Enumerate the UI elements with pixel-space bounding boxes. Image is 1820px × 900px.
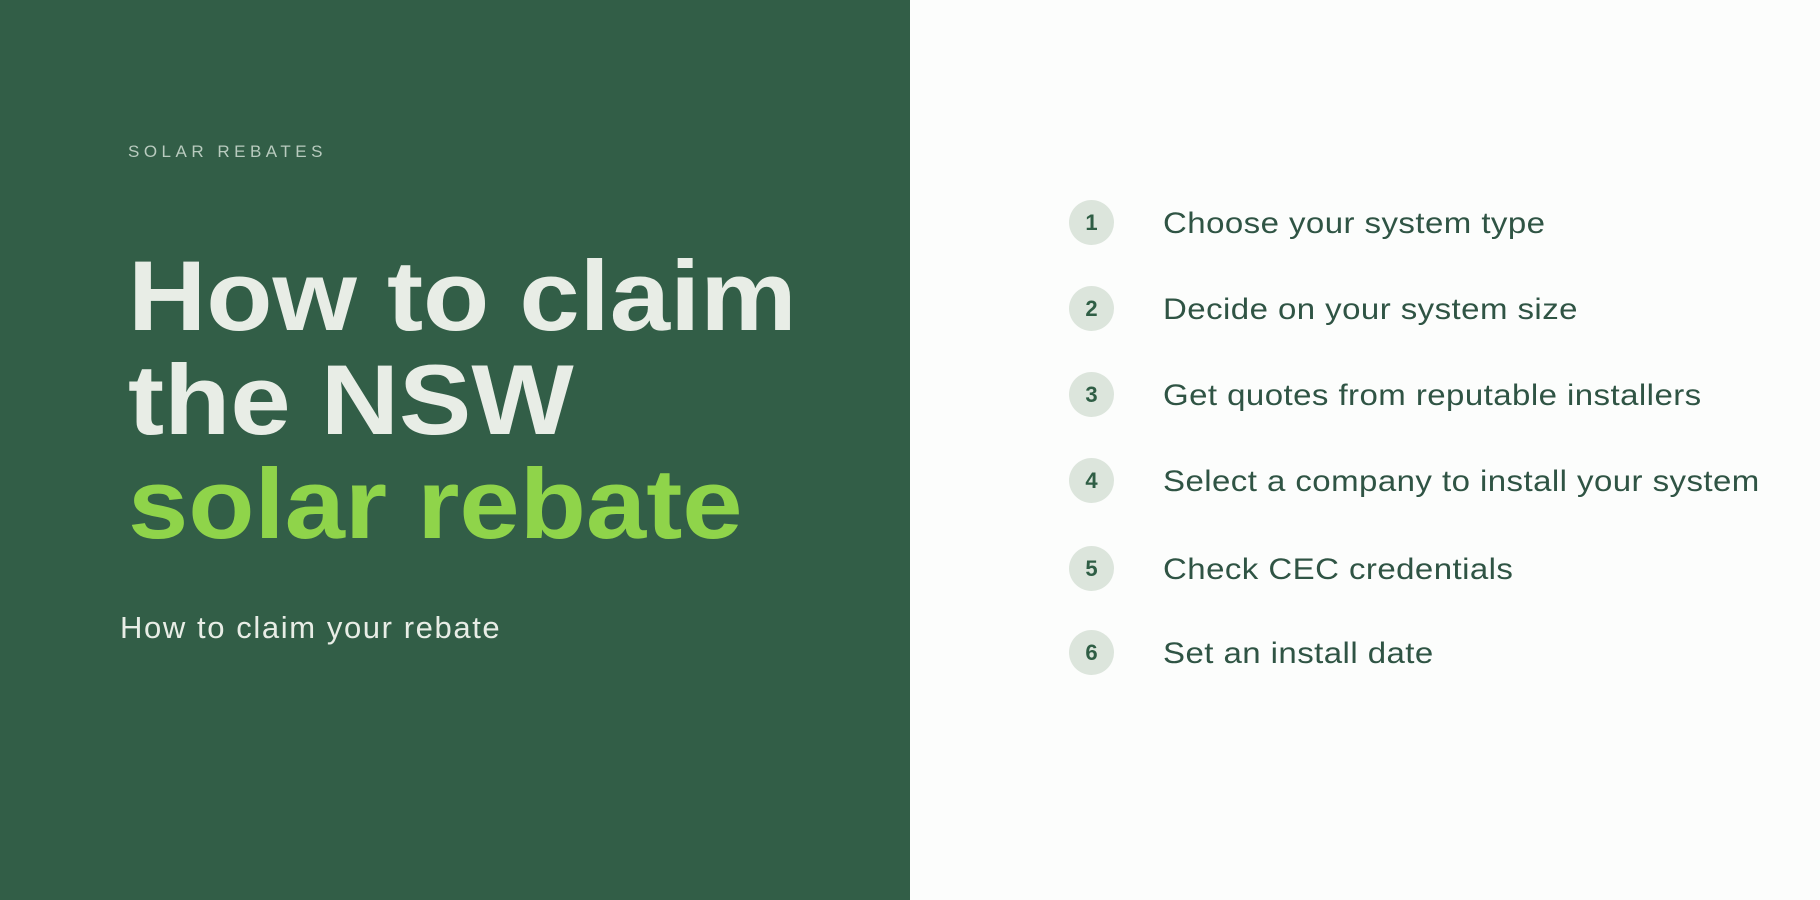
step 5	[1069, 546, 1513, 591]
step 6: 6	[1085, 640, 1098, 665]
step 3: 3	[1085, 382, 1098, 407]
title: How to claim	[128, 240, 797, 351]
title	[128, 240, 797, 559]
step 4: Select a company to install your system	[1163, 465, 1760, 498]
panel: left intro	[0, 0, 910, 900]
step 4: 4	[1085, 468, 1098, 493]
step 4	[1069, 458, 1760, 503]
eyebrow label: SOLAR REBATES	[128, 142, 327, 161]
step 2	[1069, 286, 1578, 331]
step 1: 1	[1085, 210, 1098, 235]
step 5: 5	[1085, 556, 1098, 581]
step 5: Check CEC credentials	[1163, 553, 1513, 586]
title: the NSW	[128, 344, 574, 455]
title: solar rebate	[128, 448, 743, 559]
step 3: Get quotes from reputable installers	[1163, 379, 1702, 412]
subtitle: How to claim your rebate	[120, 610, 501, 645]
step 2: 2	[1085, 296, 1098, 321]
step 3	[1069, 372, 1702, 417]
step 1: Choose your system type	[1163, 207, 1545, 240]
step 6: Set an install date	[1163, 637, 1434, 670]
step 1	[1069, 200, 1545, 245]
step 2: Decide on your system size	[1163, 293, 1578, 326]
step 6	[1069, 630, 1434, 675]
